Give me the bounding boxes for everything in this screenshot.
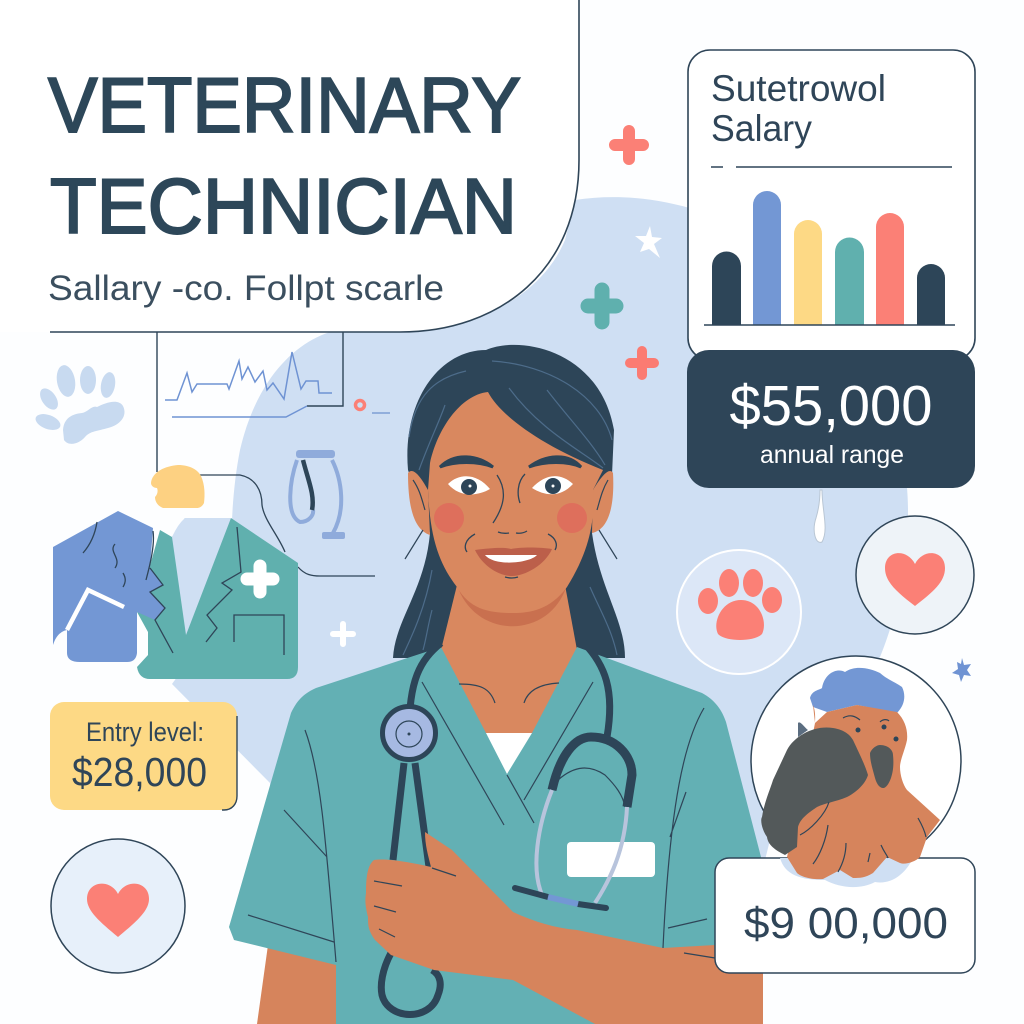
illustration: technician [229, 345, 763, 1024]
body [787, 705, 940, 879]
icon: heart bottom left [51, 839, 185, 973]
bar chart [704, 191, 955, 325]
illustration: uniforms [53, 511, 298, 679]
monitor line chart [157, 332, 390, 472]
collar lines [422, 682, 593, 825]
bottom salary callout: $9 00,000 [744, 899, 948, 948]
title: TECHNICIAN [50, 162, 517, 250]
forearm and hand [365, 832, 763, 1024]
bottom salary callout [715, 858, 975, 973]
scrubs [229, 647, 761, 1024]
title panel [0, 0, 579, 332]
salary chart card: Salary [711, 108, 812, 149]
shirt [486, 733, 532, 774]
salary chart card [688, 50, 975, 360]
icon: tool [290, 450, 345, 539]
neck [441, 585, 577, 735]
cap [810, 668, 904, 713]
chin shadow [457, 585, 567, 626]
mouth [475, 548, 552, 576]
face [428, 392, 603, 613]
entry level callout [50, 702, 237, 810]
neck creases [459, 683, 559, 703]
icon: yellow cap [151, 465, 205, 508]
chart heading: Sutetrowol [711, 68, 886, 109]
nose [465, 474, 556, 578]
dark animal [761, 727, 868, 855]
ear details and earrings [405, 480, 617, 559]
eyes and details [856, 724, 898, 742]
left arm [257, 945, 340, 1024]
connector lines [200, 475, 375, 576]
subtitle: Sallary -co. Follpt scarle [48, 269, 444, 308]
pet circle outline [751, 656, 961, 866]
icon: paw circle [677, 550, 801, 674]
background blob [172, 197, 908, 860]
title [48, 61, 521, 250]
blue jacket [53, 511, 165, 662]
icon: paw light [33, 364, 125, 444]
salary callout dark [687, 350, 975, 488]
entry level callout: $28,000 [72, 749, 207, 795]
illustration: pet [761, 668, 940, 887]
brows and eyes [440, 457, 581, 467]
icon: heart right [856, 516, 974, 634]
title: VETERINARY [48, 61, 521, 149]
open mouth [870, 745, 893, 788]
name badge [567, 842, 655, 877]
icon: drop [814, 490, 825, 542]
decorative plus icons [333, 131, 971, 682]
hair [393, 345, 625, 658]
entry level callout: Entry level: [86, 717, 204, 747]
soft shadow [780, 858, 913, 887]
green jacket [137, 518, 298, 679]
salary callout dark: $55,000 [730, 374, 932, 438]
cheeks [434, 503, 464, 533]
salary callout dark: annual range [760, 441, 904, 469]
ears [408, 471, 613, 535]
stethoscope upper [381, 643, 632, 1015]
